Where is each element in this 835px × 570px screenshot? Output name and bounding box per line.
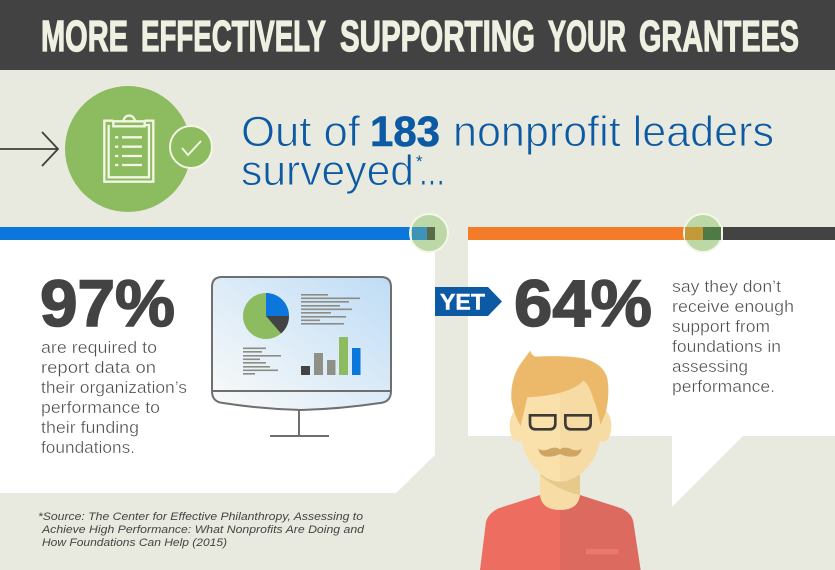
statistic: 64%: 64% xyxy=(514,266,652,340)
text block: left description xyxy=(41,338,187,457)
neck xyxy=(540,470,580,510)
statistic: 97%: 97% xyxy=(40,266,175,340)
title banner: EFFECTIVELY xyxy=(141,12,326,61)
pie chart xyxy=(243,293,289,339)
heading: survey intro: 183 xyxy=(370,108,440,156)
heading: survey intro xyxy=(241,108,774,195)
text block: left description: their funding xyxy=(41,418,139,437)
panel: right statistic card xyxy=(468,214,835,507)
text block: left description: foundations. xyxy=(41,438,135,457)
text lines lower left xyxy=(243,348,281,375)
moustache xyxy=(538,448,582,457)
source footnote: Achieve High Performance: What Nonprofits Are Doing and xyxy=(41,524,365,536)
text block: left description: report data on xyxy=(41,358,156,377)
icon: computer monitor with charts xyxy=(212,277,391,436)
text block: right description: performance. xyxy=(672,377,775,396)
source footnote: How Foundations Can Help (2015) xyxy=(42,537,227,549)
text block: right description: receive enough xyxy=(672,297,794,316)
hair xyxy=(511,351,608,426)
title banner: YOUR xyxy=(548,12,626,61)
ears xyxy=(510,410,611,442)
text block: right description: support from xyxy=(672,317,770,336)
text block: left description: performance to xyxy=(41,398,160,417)
title banner: MORE xyxy=(41,12,128,61)
text block: right description: say they don’t xyxy=(672,277,781,296)
source footnote xyxy=(38,511,365,549)
YET badge xyxy=(435,287,502,316)
text block: right description: foundations in xyxy=(672,337,781,356)
glasses xyxy=(530,415,591,429)
illustration: man with glasses and moustache xyxy=(480,351,641,570)
heading: survey intro: ... xyxy=(419,147,445,195)
text block: right description: assessing xyxy=(672,357,748,376)
YET badge: YET xyxy=(440,290,486,314)
bar chart xyxy=(301,337,360,375)
title banner: SUPPORTING xyxy=(340,12,535,61)
heading: survey intro: * xyxy=(416,152,423,171)
text block: right description xyxy=(672,277,794,396)
title banner xyxy=(0,0,835,70)
text lines upper right xyxy=(301,294,360,325)
text block: left description: their organization’s xyxy=(41,378,187,397)
heading: survey intro: surveyed xyxy=(241,147,414,195)
source footnote: *Source: The Center for Effective Philanthropy, Assessing to xyxy=(38,511,363,523)
panel: left statistic card xyxy=(0,214,448,493)
face xyxy=(520,373,602,482)
heading: survey intro: nonprofit leaders xyxy=(453,108,774,156)
icon: clipboard in green circle xyxy=(65,86,212,212)
heading: survey intro: Out of xyxy=(241,108,361,156)
arrow xyxy=(0,132,58,166)
shirt xyxy=(480,495,641,570)
text block: left description: are required to xyxy=(41,338,157,357)
